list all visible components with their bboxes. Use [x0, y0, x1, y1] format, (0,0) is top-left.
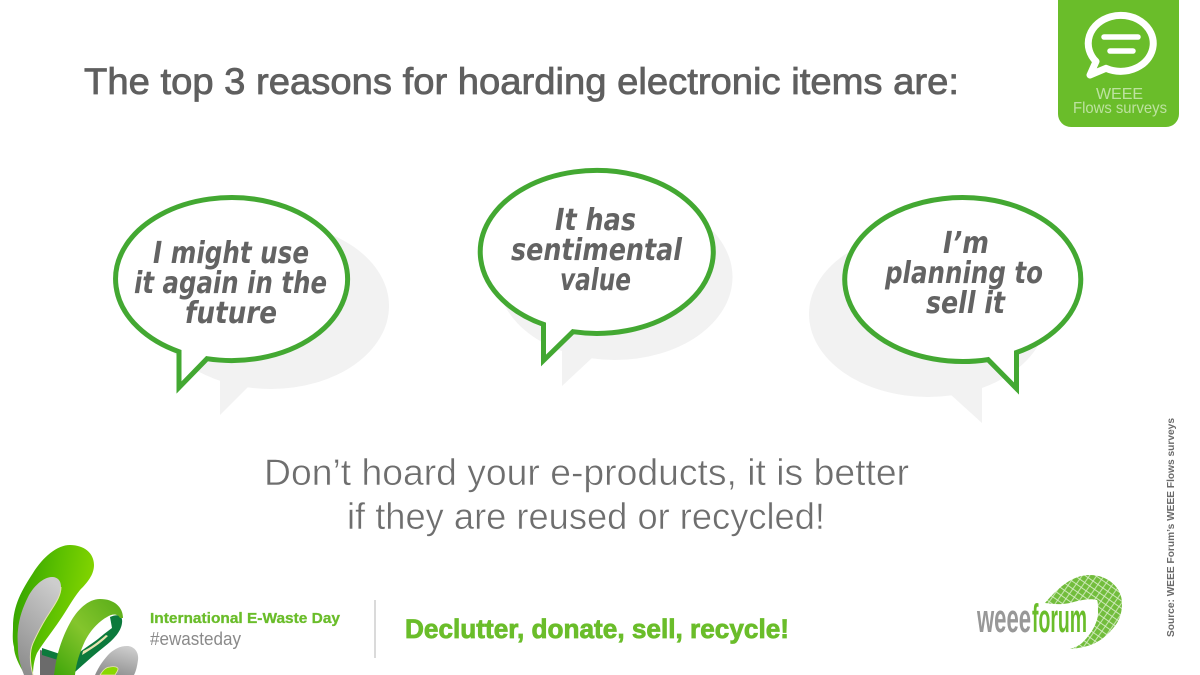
speech bubble 3: planning to — [884, 256, 1043, 291]
event label: #ewasteday — [150, 629, 241, 649]
event label: International E-Waste Day — [150, 610, 341, 627]
speech bubble 2: sentimental — [511, 233, 683, 268]
speech bubble 3 — [809, 197, 1081, 423]
event label — [150, 610, 341, 649]
closing message: if they are reused or recycled! — [347, 496, 825, 537]
speech bubble 1 — [116, 198, 389, 415]
icon: International E-Waste Day logo — [13, 545, 138, 675]
title: The top 3 reasons for hoarding electronic items are: — [84, 61, 959, 102]
logo: WEEE Forum: forum — [1032, 597, 1087, 641]
badge: WEEE Flows surveys: WEEE — [1096, 86, 1143, 103]
speech bubble 2: It has — [555, 203, 636, 238]
speech bubble 1: future — [185, 296, 277, 331]
badge: WEEE Flows surveys — [1058, 0, 1179, 127]
speech bubble 2: value — [560, 263, 631, 298]
speech bubble 3: I’m — [943, 226, 989, 261]
speech bubble 2 — [480, 170, 732, 386]
closing message — [264, 452, 909, 537]
logo: WEEE Forum — [976, 575, 1122, 649]
speech bubble 1: it again in the — [134, 266, 327, 301]
icon: chat bubble — [1088, 15, 1153, 75]
badge: WEEE Flows surveys: Flows surveys — [1073, 100, 1167, 117]
closing message: Don’t hoard your e-products, it is better — [264, 452, 909, 493]
speech bubble 3: sell it — [926, 286, 1006, 321]
source note: Source: WEEE Forum’s WEEE Flows surveys — [1165, 418, 1177, 637]
speech bubble 1: I might use — [153, 236, 309, 271]
slogan: Declutter, donate, sell, recycle! — [405, 614, 789, 644]
logo: WEEE Forum: weee — [976, 597, 1031, 641]
